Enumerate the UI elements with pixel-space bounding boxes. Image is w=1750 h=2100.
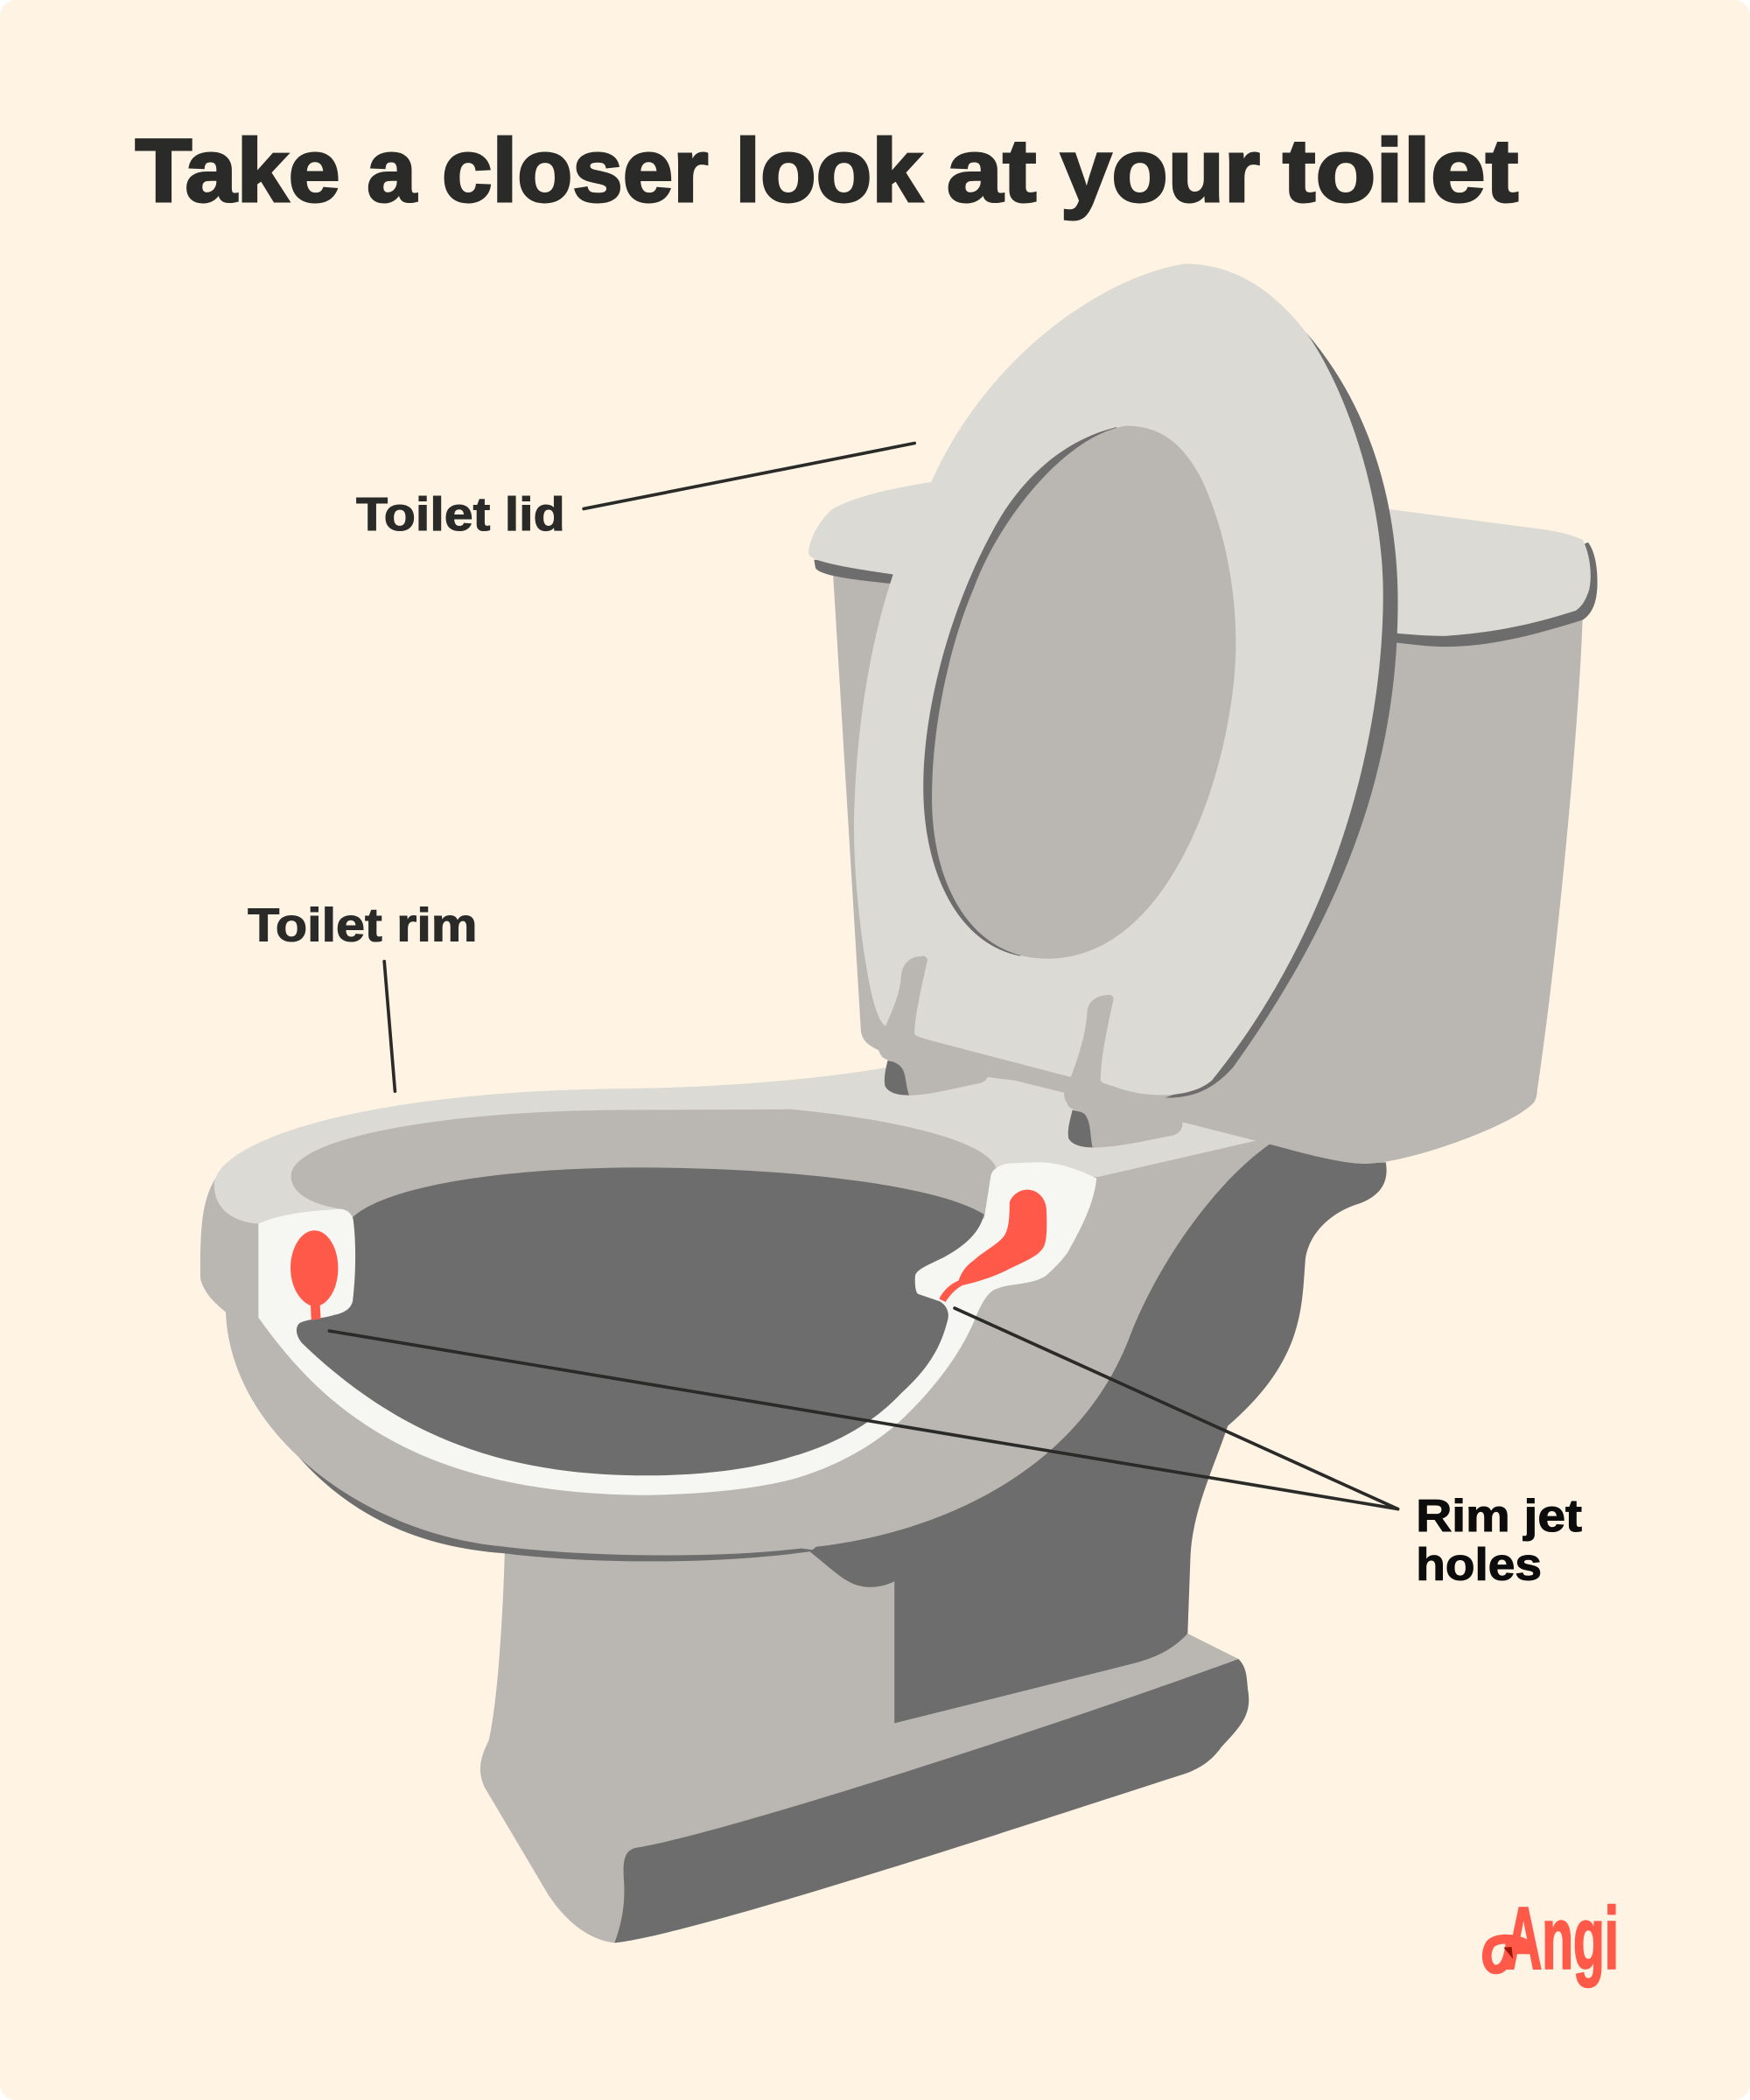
- label: rim jet holes: holes: [1416, 1540, 1542, 1591]
- rim inner slope: [291, 1110, 996, 1222]
- lid inner panel: [932, 426, 1236, 959]
- label: toilet lid: Toilet lid: [356, 489, 565, 541]
- hinge two foot: [1068, 1110, 1096, 1147]
- shadow under the bowl: [275, 1426, 816, 1561]
- lid opening shadow: [923, 427, 1116, 956]
- leader line: toilet rim: [384, 962, 395, 1091]
- title: at: [947, 120, 1036, 220]
- tank lid left underside: [814, 560, 897, 584]
- hinge two: [1064, 995, 1183, 1147]
- label: rim jet holes: [1416, 1491, 1582, 1591]
- leader line: toilet lid: [584, 444, 914, 508]
- title: [136, 120, 1518, 220]
- logo: Angi: Angi: [1505, 1889, 1619, 1987]
- hinge one: [878, 956, 989, 1096]
- toilet base pedestal: [480, 1540, 1238, 1942]
- seat back strip: [884, 1033, 1272, 1144]
- title: your: [1060, 120, 1260, 220]
- label: toilet rim: Toilet rim: [248, 900, 478, 952]
- base front dark face: [614, 1659, 1249, 1942]
- leader lines: rim jet holes: [329, 1308, 1398, 1509]
- bowl outer body: [200, 1111, 1270, 1555]
- hinge one stem on lid: [878, 956, 936, 1050]
- tank lid right underside: [1392, 542, 1598, 647]
- tank lid right: [1386, 508, 1591, 636]
- trapway dark side: [810, 1144, 1387, 1723]
- hinge two stem on lid: [1068, 995, 1122, 1098]
- title: look: [735, 120, 923, 220]
- logo: Angi: [1487, 1889, 1619, 1987]
- hinge one foot: [885, 1060, 911, 1096]
- white rim cutaway channel: [258, 1162, 1096, 1495]
- dark bowl interior: [297, 1167, 984, 1475]
- tank body: [833, 570, 1583, 1164]
- toilet lid: [854, 263, 1383, 1096]
- illustration: toilet: [200, 263, 1598, 1942]
- tank lid left: [808, 482, 937, 574]
- red water channel left: [290, 1230, 338, 1320]
- label: rim jet holes: Rim jet: [1416, 1491, 1582, 1542]
- lid outer shadow edge: [1165, 333, 1398, 1098]
- toilet rim top surface: [214, 1066, 1261, 1224]
- title: toilet: [1283, 120, 1518, 220]
- title: a: [367, 120, 417, 220]
- title: Take: [136, 120, 340, 220]
- red water channel right: [939, 1190, 1046, 1302]
- title: closer: [442, 120, 708, 220]
